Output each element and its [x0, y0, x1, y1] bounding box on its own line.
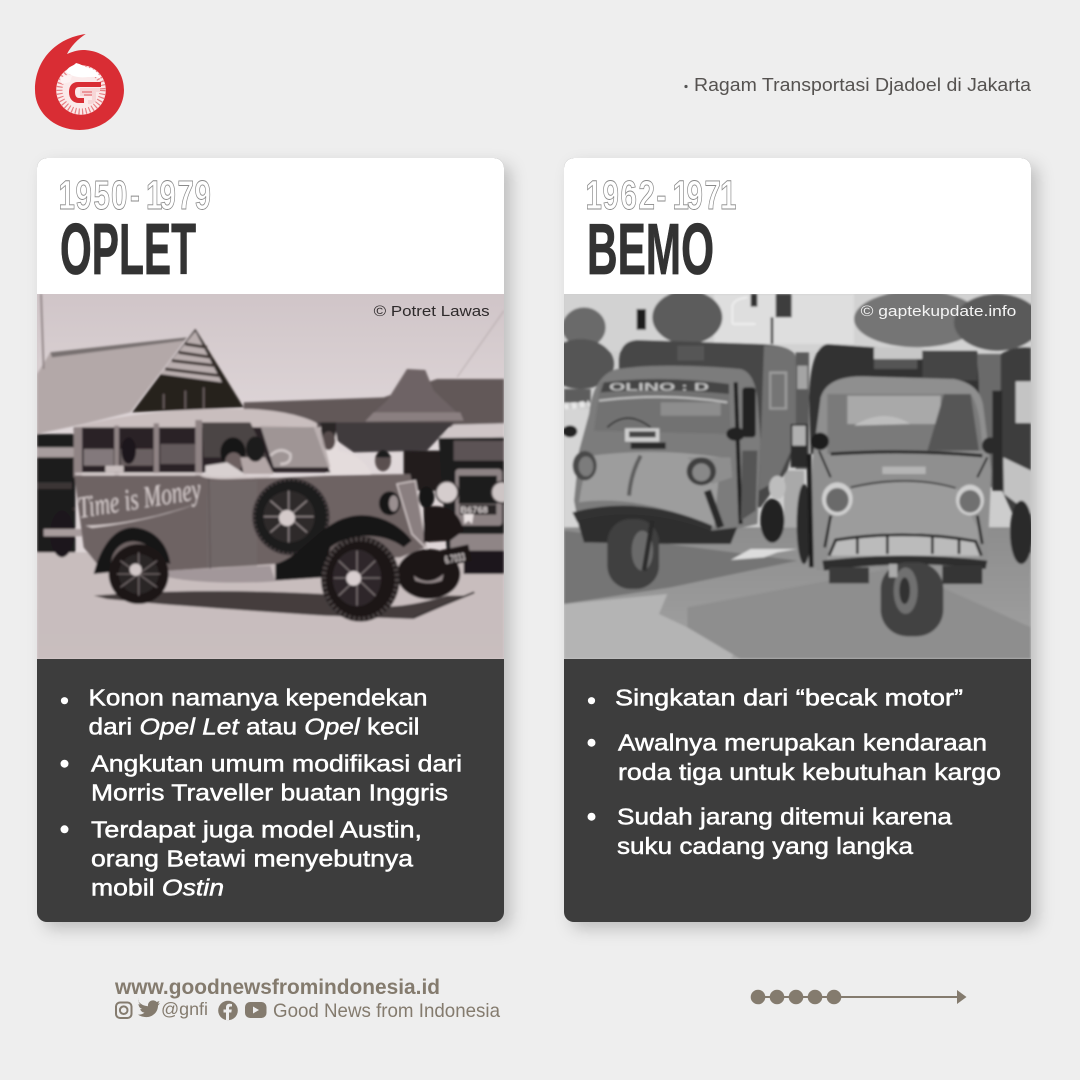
bullet list: oplet: Konon namanya kependekan [88, 685, 428, 711]
right bemo: rear wheels [797, 484, 811, 564]
left bemo: front wheel [607, 519, 659, 589]
right bemo: canopy [809, 344, 979, 454]
photo: oplet car: 6.7033 [444, 551, 466, 567]
background: sky, buildings, trees [564, 294, 1031, 351]
bullet list: bemo: suku cadang yang langka [617, 833, 914, 859]
bullet list: bemo: Awalnya merupakan kendaraan [618, 730, 987, 756]
fenders and running board [275, 515, 412, 581]
photo credit: © gaptekupdate.info [861, 304, 1016, 320]
panel: bemo [547, 158, 1041, 922]
heading: BEMO [587, 210, 714, 290]
front wheel [321, 536, 400, 622]
logo: red GNFI speech mark with emblem [35, 34, 124, 130]
icon: youtube [245, 1002, 266, 1018]
left bemo: headlights [573, 451, 597, 480]
passengers [121, 437, 136, 464]
road [564, 409, 604, 542]
bullet list: oplet: dari Opel Let atau Opel kecil [88, 714, 420, 740]
bullet list: oplet: Morris Traveller buatan Inggris [91, 780, 448, 806]
arrow with page dots [751, 990, 966, 1004]
left bemo: cab [574, 366, 761, 534]
bullet list: oplet: Angkutan umum modifikasi dari [91, 751, 462, 777]
header breadcrumb: Ragam Transportasi Djadoel di Jakarta [694, 75, 1032, 95]
brand name: Good News from Indonesia [273, 1000, 500, 1022]
right bemo: mirrors [811, 433, 829, 450]
hood grill [397, 481, 427, 549]
bullet list: bemo: Sudah jarang ditemui karena [617, 804, 953, 830]
icon: twitter [138, 998, 160, 1017]
spare wheel [253, 478, 329, 555]
far right bemo [999, 347, 1031, 554]
right background car [439, 423, 504, 554]
car shadow [94, 591, 467, 619]
photo: oplet car: B6768 [460, 505, 488, 515]
card header [37, 158, 504, 294]
panel: oplet [37, 158, 513, 922]
card background [564, 158, 1031, 922]
bullet list: bemo: roda tiga untuk kebutuhan kargo [618, 759, 1001, 785]
right bemo: cab [810, 374, 992, 528]
heading: OPLET [60, 210, 196, 290]
right bemo: headlights [822, 482, 853, 516]
icon: instagram [116, 1002, 132, 1018]
bullet list: oplet: orang Betawi menyebutnya [91, 846, 414, 872]
headlights [379, 491, 400, 515]
back wall and far roofs [244, 379, 504, 427]
wires [457, 311, 504, 377]
left bemo: nose [579, 452, 721, 527]
photo: bemo vehicles [547, 291, 1041, 659]
right bemo: bumper grille [829, 533, 981, 556]
windows [84, 449, 114, 466]
years: 1950-1979 [59, 172, 211, 218]
rear wheel [109, 544, 169, 604]
left bemo: bumper and shadow [572, 506, 712, 532]
left bemo: canopy [619, 340, 796, 507]
sign text: Time is Money [75, 472, 203, 525]
ground [37, 552, 504, 659]
front far wheel [397, 549, 460, 599]
barn [37, 337, 187, 434]
body [74, 474, 425, 571]
card background [37, 158, 504, 922]
bullet list: oplet: Terdapat juga model Austin, [91, 817, 422, 843]
bullet list: oplet: mobil Ostin [91, 874, 224, 900]
photo credit: © Potret Lawas [374, 304, 490, 320]
bullet list: oplet [60, 685, 462, 900]
handle: @gnfi [161, 999, 208, 1019]
photo: bemo vehicles: OLINO : D [609, 382, 710, 394]
icon: facebook [218, 1001, 238, 1020]
right bemo: front wheel [881, 562, 943, 636]
left background car parts [54, 550, 70, 559]
footer: website and social media [114, 976, 500, 1022]
standing people [320, 423, 372, 474]
bullet list: bemo [588, 685, 1001, 859]
right bemo: nose [827, 482, 981, 561]
photo: oplet car [37, 294, 513, 659]
left bemo: rear wheel [760, 499, 784, 543]
cabin [74, 427, 330, 472]
card header [564, 158, 1031, 294]
front fender far [424, 506, 464, 542]
years: 1962-1971 [586, 172, 736, 218]
website url: www.goodnewsfromindonesia.id [114, 976, 440, 999]
car roof [74, 409, 317, 427]
bullet list: bemo: Singkatan dari “becak motor” [615, 685, 963, 711]
